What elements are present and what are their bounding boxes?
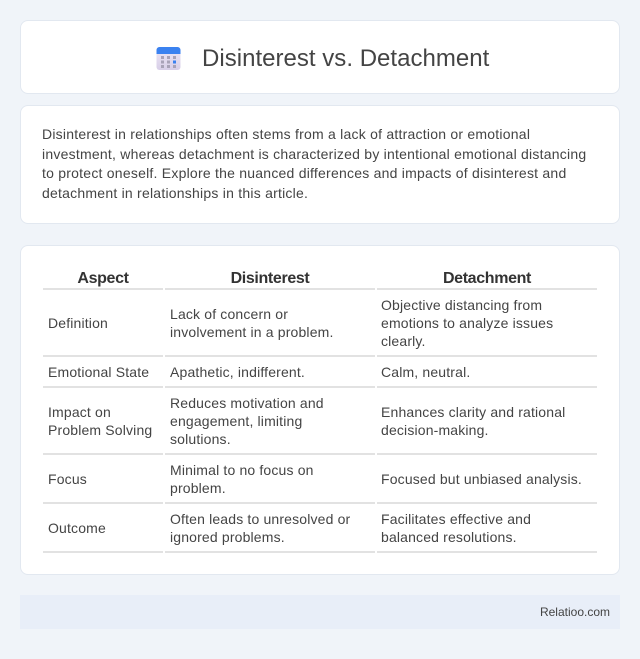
table header: Aspect (77, 270, 129, 287)
row: outcome: Facilitates effective and (381, 511, 531, 527)
panel: comparison table (20, 245, 620, 575)
row: outcome: ignored problems. (170, 529, 285, 545)
table header: Disinterest (231, 270, 309, 287)
row: focus: problem. (170, 480, 226, 496)
row: definition: Objective distancing from (381, 297, 542, 313)
intro text: Disinterest in relationships often stems from a lack of attraction or emotional (42, 126, 530, 142)
row: impact on problem solving: Reduces motivation and (170, 395, 324, 411)
row: focus (48, 462, 582, 496)
row: emotional state: Calm, neutral. (381, 364, 470, 380)
row: impact on problem solving: Problem Solving (48, 422, 152, 438)
row: impact on problem solving: solutions. (170, 431, 231, 447)
intro text: to protect oneself. Explore the nuanced differences and impacts of disinterest and (42, 165, 566, 181)
footer bar (20, 595, 620, 629)
row: definition: Lack of concern or (170, 306, 288, 322)
row: definition (48, 297, 553, 349)
title: Disinterest vs. Detachment (202, 45, 489, 72)
row: outcome: balanced resolutions. (381, 529, 517, 545)
table header: Detachment (443, 270, 531, 287)
row: outcome: Often leads to unresolved or (170, 511, 350, 527)
panel: header (20, 20, 620, 94)
row: emotional state: Emotional State (48, 364, 149, 380)
row: impact on problem solving: Enhances clarity and rational (381, 404, 565, 420)
footer credit: Relatioo.com (540, 605, 610, 619)
row: definition: clearly. (381, 333, 426, 349)
row: definition: emotions to analyze issues (381, 315, 553, 331)
row: focus: Focused but unbiased analysis. (381, 471, 582, 487)
row: definition: Definition (48, 315, 108, 331)
intro text (42, 126, 586, 201)
row: focus: Focus (48, 471, 87, 487)
row: definition: involvement in a problem. (170, 324, 334, 340)
row: outcome (48, 511, 531, 545)
row: emotional state: Apathetic, indifferent. (170, 364, 305, 380)
intro text: detachment in relationships in this article. (42, 184, 308, 200)
panel: intro (20, 105, 620, 224)
intro text: investment, whereas detachment is characterized by intentional emotional distancing (42, 146, 586, 162)
icon: calendar (156, 47, 180, 70)
row: outcome: Outcome (48, 520, 106, 536)
row: emotional state (48, 364, 470, 380)
row: focus: Minimal to no focus on (170, 462, 314, 478)
row: impact on problem solving: decision-making. (381, 422, 489, 438)
row: impact on problem solving: Impact on (48, 404, 111, 420)
table header (77, 270, 532, 287)
row: impact on problem solving (48, 395, 565, 447)
row: impact on problem solving: engagement, limiting (170, 413, 302, 429)
